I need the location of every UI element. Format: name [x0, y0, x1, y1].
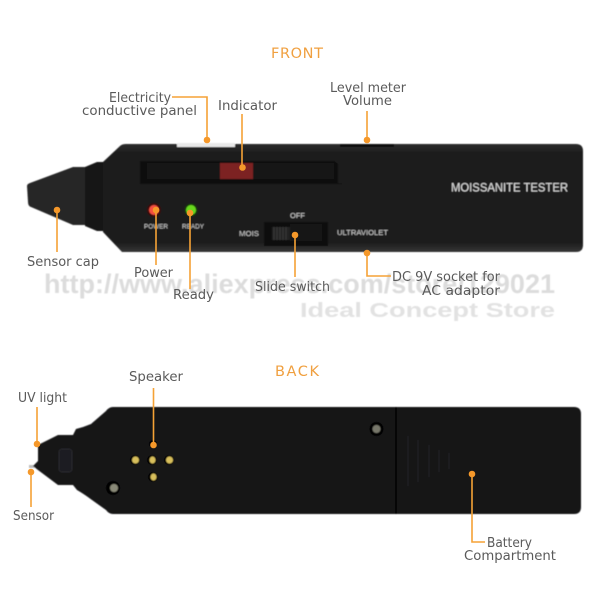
battery cover [396, 407, 449, 514]
callout: sensor: Sensor [13, 508, 54, 524]
callout: battery compartment [464, 471, 556, 564]
callout: sensor cap: Sensor cap [27, 254, 99, 270]
callout: slide switch: Slide switch [255, 279, 330, 295]
watermark: Ideal Concept Store [300, 300, 555, 322]
display window [140, 161, 344, 184]
neck [85, 162, 105, 231]
slide switch [264, 222, 328, 246]
callout: level meter volume: Level meter [330, 80, 406, 96]
callout: uv light: UV light [18, 390, 67, 406]
led labels: POWER [144, 224, 168, 230]
uv window [59, 449, 72, 472]
speaker holes [130, 440, 174, 482]
device: tester front: MOIS [239, 229, 259, 238]
callout: uv light [18, 390, 67, 447]
body [33, 407, 581, 514]
callout: indicator [218, 98, 277, 171]
callout: battery compartment: Battery [487, 535, 532, 551]
watermark [44, 269, 555, 322]
heading: front: FRONT [271, 46, 323, 62]
callout: battery compartment: Compartment [464, 548, 556, 564]
callout: level meter volume: Volume [343, 93, 392, 109]
device: tester front: ULTRAVIOLET [337, 228, 388, 237]
red indicator [220, 163, 253, 179]
callout: indicator: Indicator [218, 98, 277, 114]
switch labels: OFF [290, 211, 305, 220]
callout: electricity conductive panel: Electricity [109, 90, 171, 106]
callout: sensor cap [27, 207, 99, 270]
screws [106, 422, 384, 495]
callout: dc socket: AC adaptor [422, 283, 500, 299]
device: tester front: READY [182, 224, 205, 230]
volume slot [340, 144, 394, 147]
watermark: http://www.aliexpress.com/store/129021 [44, 269, 555, 299]
callout: slide switch [255, 232, 330, 295]
callout: electricity conductive panel: conductive panel [82, 103, 197, 119]
callout: sensor [13, 469, 54, 524]
callout: level meter volume [330, 80, 406, 143]
callout: speaker [129, 369, 183, 448]
callout: dc socket [364, 250, 500, 299]
callout: dc socket: DC 9V socket for [392, 269, 500, 285]
callout: ready: Ready [173, 287, 214, 303]
callout: ready [173, 210, 214, 303]
product name: MOISSANITE TESTER [451, 180, 568, 194]
callout: speaker: Speaker [129, 369, 183, 385]
conductive panel [177, 143, 235, 147]
body [103, 144, 583, 252]
ready led [184, 204, 198, 216]
power led [147, 203, 161, 217]
callout: power [134, 207, 173, 281]
device: tester back [29, 407, 581, 514]
heading: back: BACK [275, 364, 319, 380]
callout: electricity conductive panel [82, 90, 210, 143]
sensor cap [27, 167, 86, 225]
device: tester front [27, 143, 583, 252]
sensor tip [29, 465, 35, 468]
callout: power: Power [134, 265, 173, 281]
